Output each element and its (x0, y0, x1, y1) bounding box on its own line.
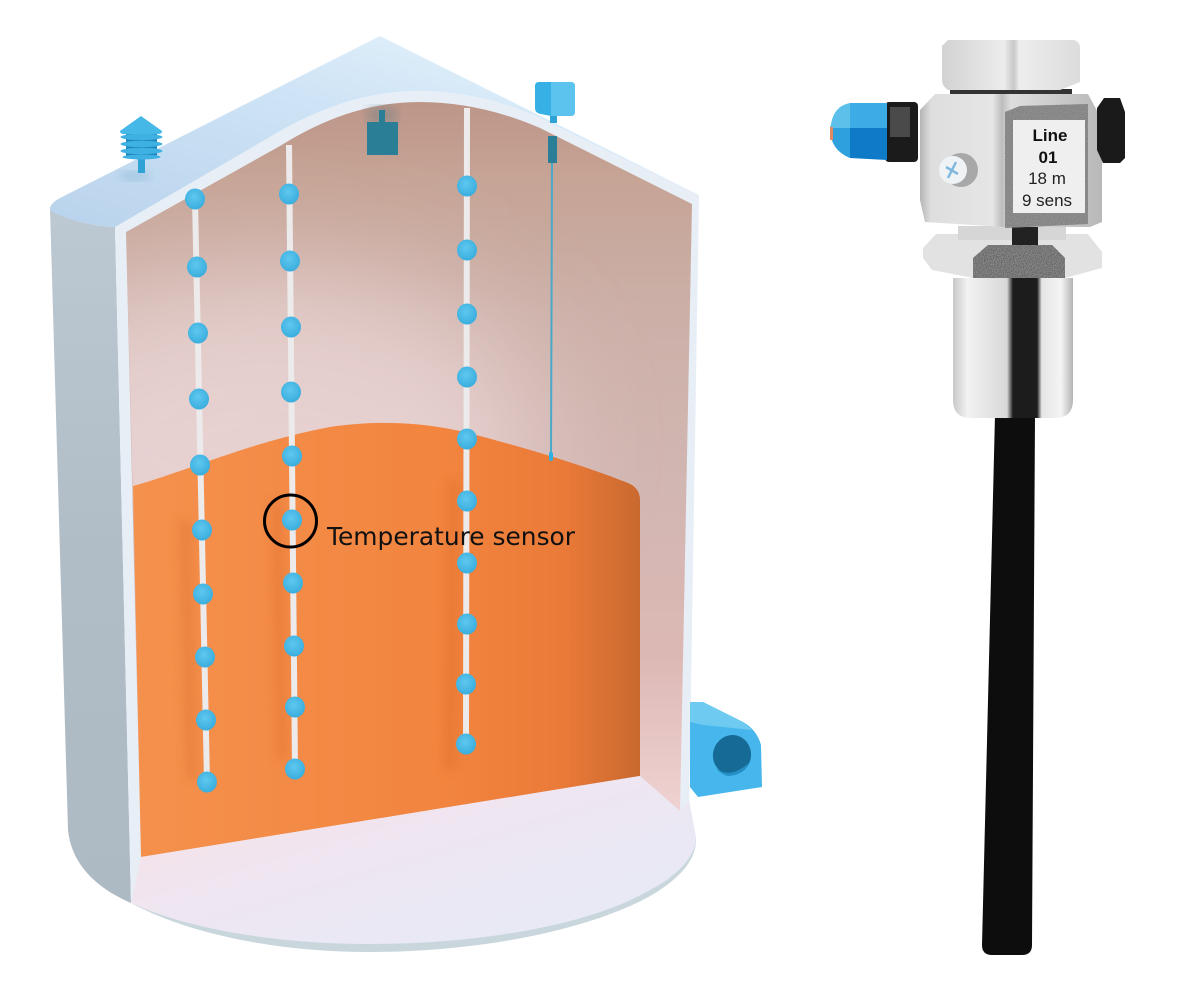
outer left wall (50, 208, 131, 903)
grey label plate (1005, 104, 1088, 228)
black side plug (1097, 98, 1125, 163)
label text plate: Line (1033, 126, 1067, 145)
cut face band (115, 91, 699, 903)
floor rim (131, 837, 696, 952)
callout: temperature sensor: Temperature sensor (326, 522, 576, 551)
roof (50, 36, 699, 227)
icon: ceiling hub (366, 106, 398, 155)
icon: weather cap on roof (119, 116, 162, 181)
threaded cylinder (953, 278, 1073, 418)
lower hex nut (923, 226, 1102, 278)
sensor cable 1 (185, 188, 217, 792)
label text plate: 18 m (1028, 169, 1066, 188)
main hex body (920, 94, 1102, 228)
blue cable gland (830, 102, 918, 162)
interior walls (126, 102, 692, 857)
silo cutaway illustration (0, 36, 762, 952)
top hex bolt (942, 40, 1080, 94)
black cable (982, 415, 1035, 955)
label text plate: 01 (1039, 148, 1057, 167)
screw (939, 153, 978, 187)
grain shadows (178, 480, 460, 780)
product photo: sensor head and cable (830, 40, 1125, 955)
icon: radar level sensor (535, 82, 575, 461)
sensor cable 2 (279, 145, 305, 780)
label text plate: 9 sens (1022, 191, 1072, 210)
grain fill (133, 423, 640, 857)
icon: side outlet block (690, 702, 762, 797)
callout: temperature sensor (264, 495, 576, 551)
sensor cable 3 (456, 108, 477, 754)
silo floor (131, 776, 696, 944)
label text plate (1013, 120, 1085, 213)
interior wall light falloff (126, 224, 566, 500)
